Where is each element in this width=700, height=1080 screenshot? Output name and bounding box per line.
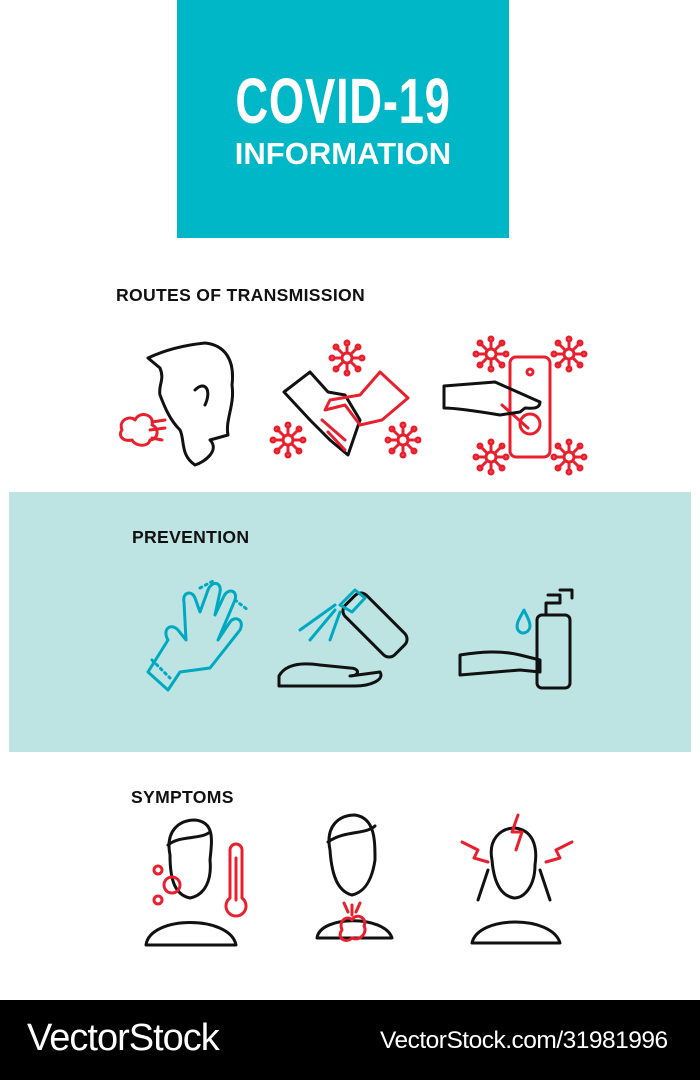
icon: glove hand [148,580,248,690]
icon: coughing head [120,343,233,465]
heading: prevention: PREVENTION [132,527,249,547]
icon: soap dispenser and hand [460,590,572,688]
footer url: VectorStock.com/31981996 [380,1027,668,1054]
title text: INFORMATION [235,136,451,171]
icon: fever head [146,820,246,945]
title text [235,65,451,171]
icon: cough head [317,815,392,940]
title text: COVID-19 [235,65,451,137]
icon: hand on door handle [444,337,586,474]
footer brand: VectorStock [27,1017,219,1059]
title box [177,0,509,238]
icon: headache head [462,815,572,943]
icon: handshake [271,341,420,457]
icon: spray and hand [279,590,410,686]
panel: prevention band [9,492,691,752]
heading: routes of transmission: ROUTES OF TRANSMISSION [116,285,365,305]
heading: symptoms: SYMPTOMS [131,787,234,807]
footer watermark bar [0,1000,700,1080]
